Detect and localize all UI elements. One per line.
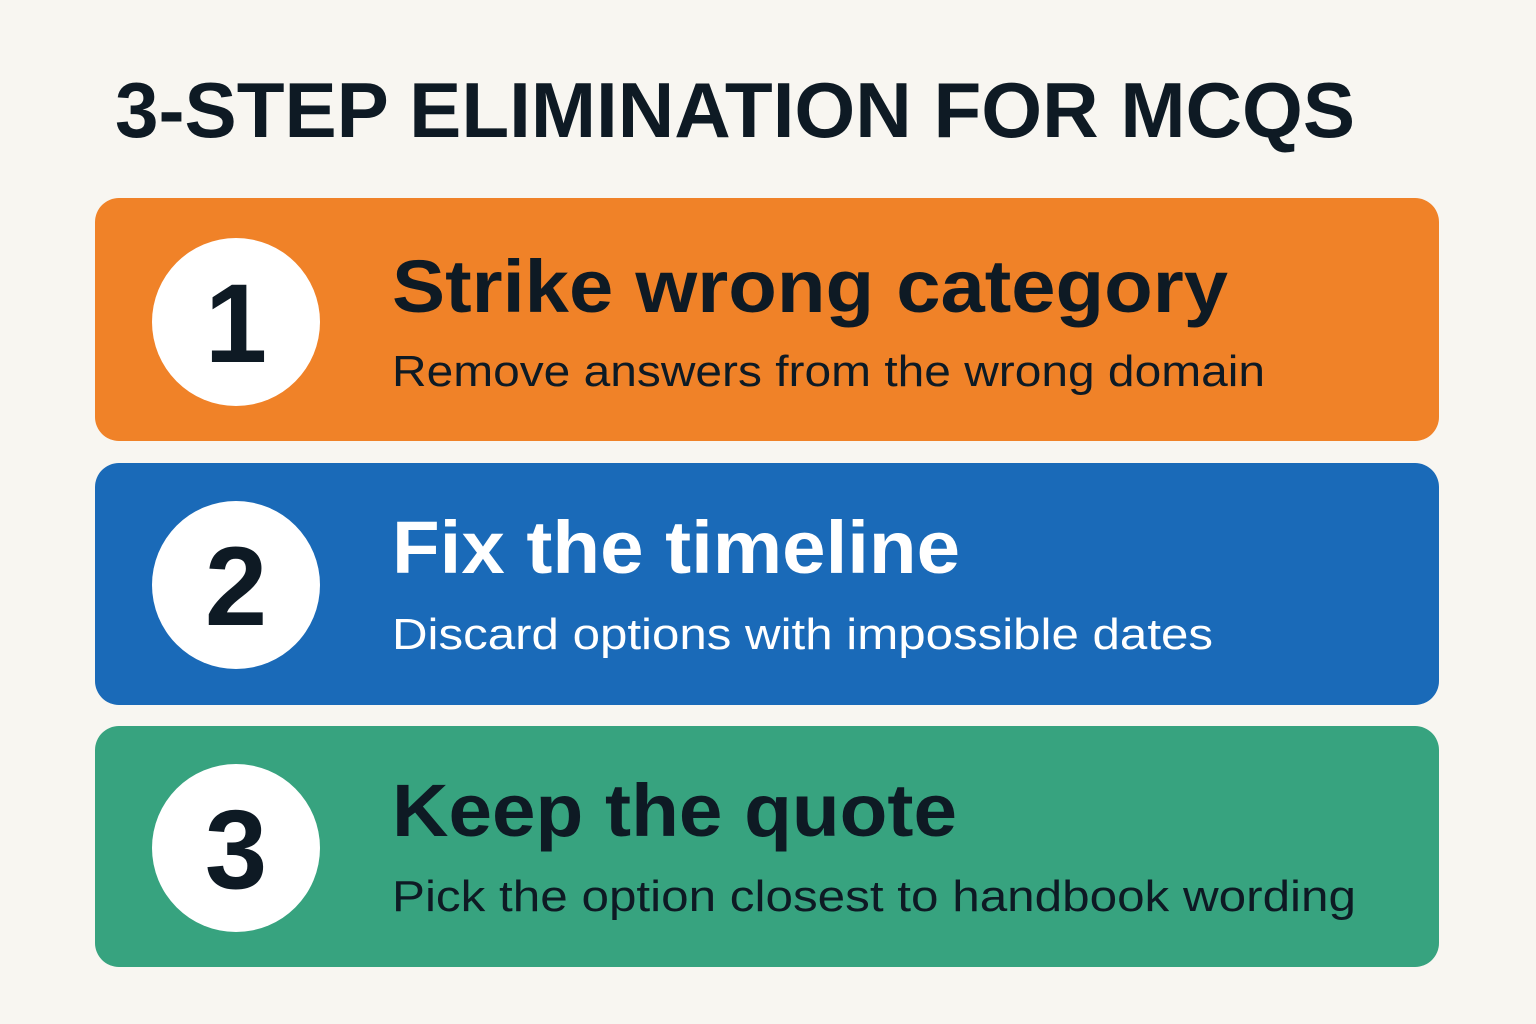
panel: step 2 [95,463,1439,705]
title: 3-STEP ELIMINATION FOR MCQS [115,66,1355,154]
panel: step 1 [95,198,1439,441]
text: step 3 description: Pick the option closest to handbook wording [392,872,1356,921]
icon: number 3 circle: 3 [205,787,267,912]
icon: number 1 circle: 1 [205,261,267,386]
text: step 1 description: Remove answers from the wrong domain [392,347,1265,396]
icon: number 2 circle: 2 [205,524,267,649]
icon: number 3 circle [152,764,320,932]
icon: number 2 circle [152,501,320,669]
heading: step 2: Fix the timeline [392,506,960,589]
heading: step 1: Strike wrong category [392,245,1228,328]
heading: step 3: Keep the quote [392,769,957,852]
icon: number 1 circle [152,238,320,406]
panel: step 3 [95,726,1439,967]
text: step 2 description: Discard options with impossible dates [392,610,1213,659]
